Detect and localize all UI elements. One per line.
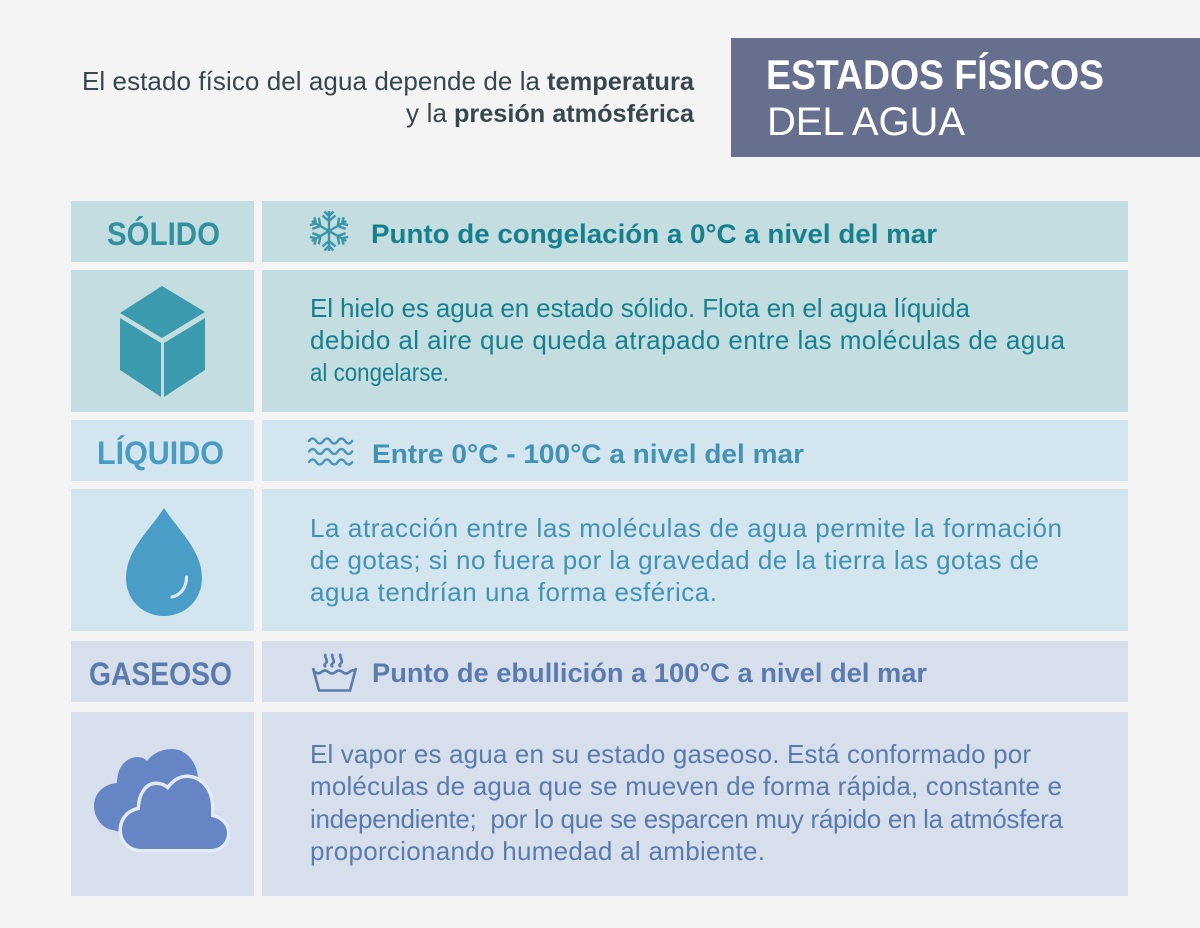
subtitle: intro text: [82, 66, 695, 128]
heading cell: líquido: LÍQUIDO: [97, 435, 224, 471]
fact bar: punto de congelación: [262, 201, 1128, 262]
icon: waves: [309, 438, 352, 464]
heading cell: líquido: [71, 420, 254, 481]
subtitle: intro text: y la: [406, 98, 448, 128]
description: gotas: [262, 489, 1128, 631]
description: hielo: El hielo es agua en estado sólido. Flota en el agua líquida: [310, 293, 971, 323]
heading cell: sólido: SÓLIDO: [107, 216, 220, 252]
icon cell: ice cube: [71, 270, 254, 412]
panel: líquido: [71, 420, 1128, 631]
subtitle: intro text: El estado físico del agua depende de la: [82, 66, 541, 96]
description: gotas: agua tendrían una forma esférica.: [310, 577, 717, 607]
description: vapor: [262, 712, 1128, 896]
panel: gaseoso: [71, 641, 1128, 896]
fact bar: entre 0 y 100 grados: [262, 420, 1128, 481]
fact bar: punto de ebullición: [262, 641, 1128, 702]
fact bar: entre 0 y 100 grados: Entre 0°C - 100°C a nivel del mar: [372, 439, 805, 469]
panel: sólido: [71, 201, 1128, 412]
description: hielo: al congelarse.: [310, 359, 449, 387]
title panel: DEL AGUA: [767, 100, 965, 144]
icon cell: water drop: [71, 489, 254, 631]
description: hielo: debido al aire que queda atrapado entre las moléculas de agua: [310, 325, 1066, 355]
subtitle: intro text: presión atmósférica: [454, 100, 695, 128]
description: vapor: independiente; por lo que se esparcen muy rápido en la atmósfera: [310, 804, 1064, 834]
icon cell: clouds: [71, 712, 254, 896]
heading cell: gaseoso: [71, 641, 254, 702]
title panel: [731, 38, 1200, 157]
description: hielo: [262, 270, 1128, 412]
description: vapor: moléculas de agua que se mueven de forma rápida, constante e: [310, 771, 1062, 801]
fact bar: punto de ebullición: Punto de ebullición a 100°C a nivel del mar: [372, 658, 927, 688]
heading cell: sólido: [71, 201, 254, 262]
fact bar: punto de congelación: Punto de congelación a 0°C a nivel del mar: [371, 219, 937, 249]
icon: boiling pot: [313, 654, 356, 690]
subtitle: intro text: temperatura: [547, 68, 695, 96]
title panel: ESTADOS FÍSICOS: [766, 51, 1104, 98]
description: gotas: La atracción entre las moléculas de agua permite la formación: [310, 513, 1062, 543]
description: vapor: El vapor es agua en su estado gaseoso. Está conformado por: [310, 739, 1031, 769]
description: gotas: de gotas; si no fuera por la gravedad de la tierra las gotas de: [310, 545, 1039, 575]
description: vapor: proporcionando humedad al ambiente.: [310, 836, 765, 866]
icon: snowflake: [308, 211, 350, 251]
heading cell: gaseoso: GASEOSO: [89, 656, 232, 692]
